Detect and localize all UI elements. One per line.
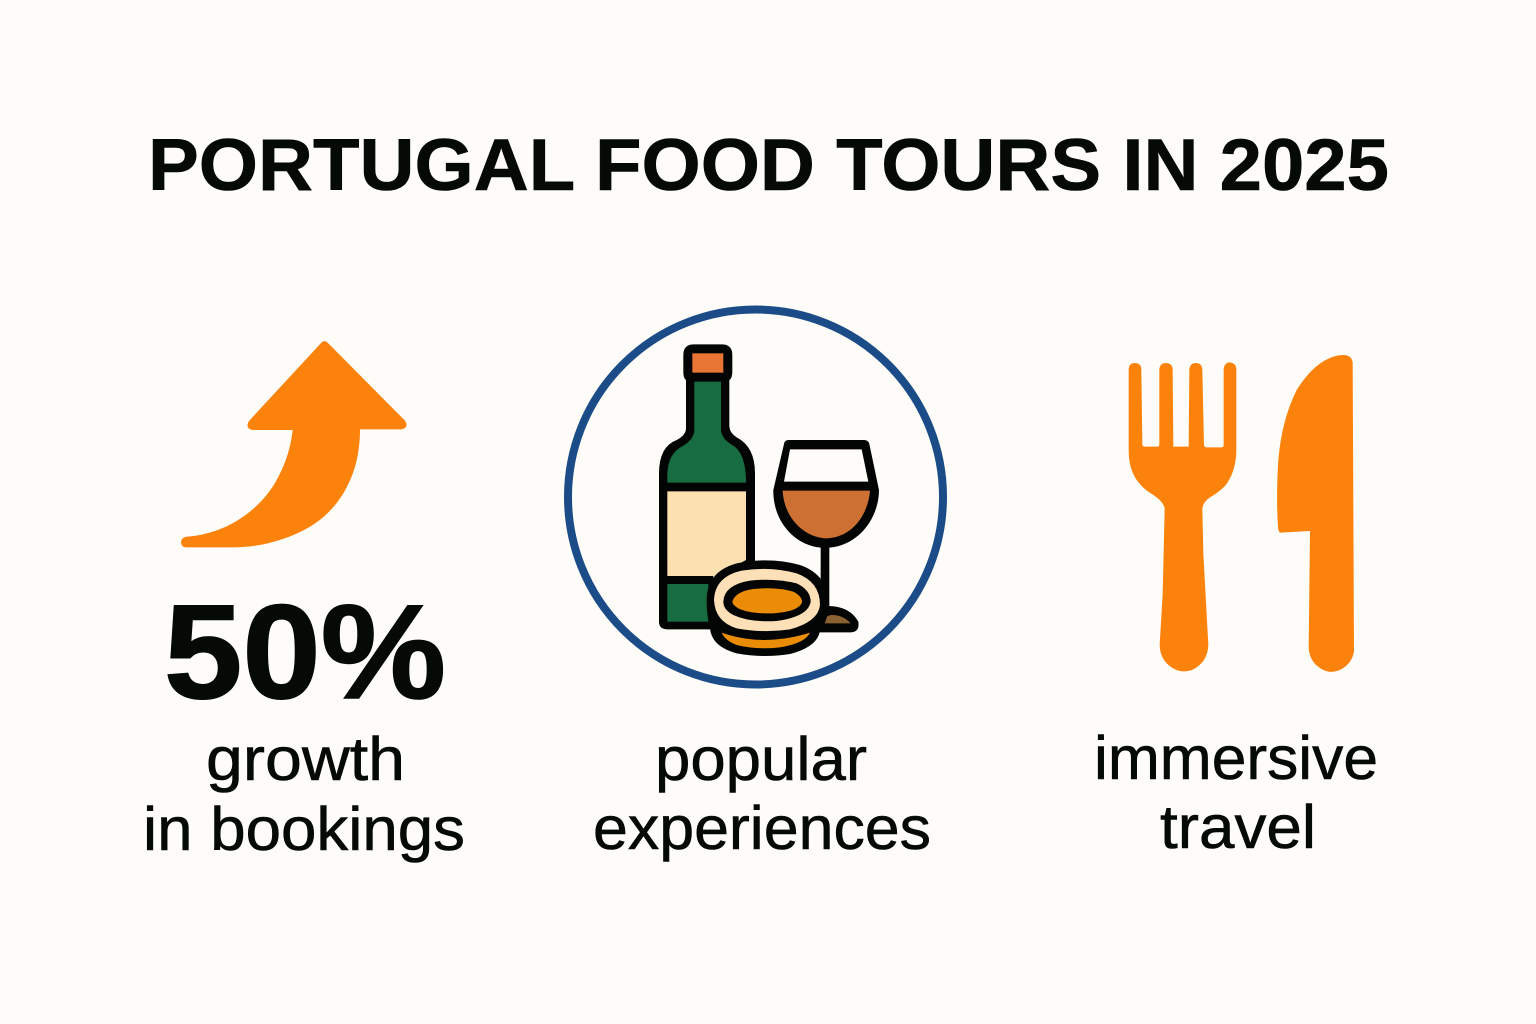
icon: circle with wine and pastry	[568, 310, 943, 684]
label: immersive travel: travel	[1160, 793, 1316, 861]
title: PORTUGAL FOOD TOURS IN 2025	[148, 125, 1389, 206]
panel: immersive travel	[1094, 355, 1378, 861]
panel: popular experiences	[568, 310, 943, 862]
label: popular experiences: popular	[655, 725, 867, 793]
label: popular experiences: experiences	[593, 794, 931, 862]
icon: fork and knife	[1129, 355, 1354, 672]
label: growth in bookings: growth	[206, 725, 405, 793]
label: immersive travel: immersive	[1094, 724, 1378, 792]
label: growth in bookings: in bookings	[143, 795, 465, 863]
icon: wine bottle	[659, 344, 755, 629]
label: growth in bookings	[143, 725, 465, 863]
label: immersive travel	[1094, 724, 1378, 861]
icon: wine glass	[773, 440, 879, 632]
icon: upward curved arrow	[181, 341, 407, 547]
icon: fork	[1129, 362, 1236, 671]
label: popular experiences	[593, 725, 931, 862]
statistic: 50%: 50%	[164, 578, 446, 727]
icon: knife	[1277, 355, 1354, 672]
panel: growth in bookings	[143, 341, 465, 863]
icon: custard tart	[707, 560, 828, 656]
